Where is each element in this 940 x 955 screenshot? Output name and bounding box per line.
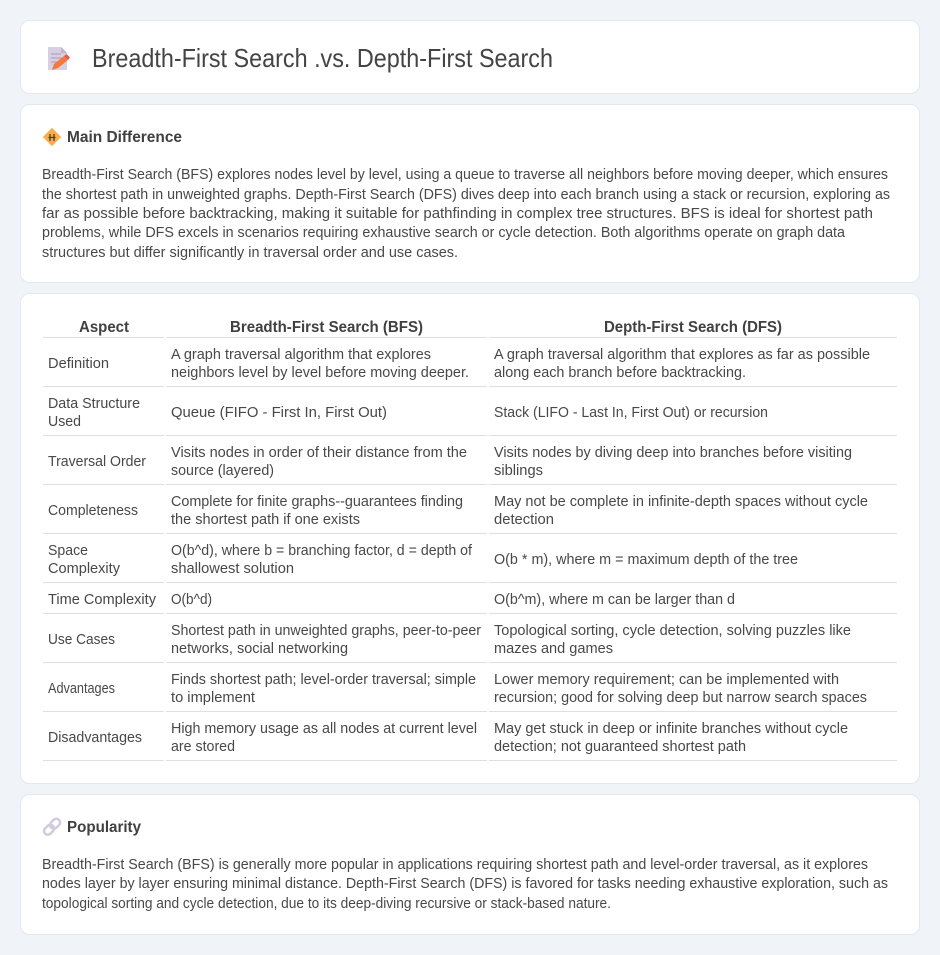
row: completeness: Completeness <box>48 503 138 519</box>
row: completeness: Complete for finite graphs--guarantees finding <box>171 494 463 510</box>
row: definition: neighbors level by level before moving deeper. <box>171 365 469 381</box>
table header row: Depth-First Search (DFS) <box>604 319 782 336</box>
row: disadvantages: are stored <box>171 739 235 755</box>
row: disadvantages: May get stuck in deep or infinite branches without cycle <box>494 721 848 737</box>
row: advantages: recursion; good for solving deep but narrow search spaces <box>494 690 867 706</box>
row: traversal order: siblings <box>494 463 543 479</box>
row: use cases <box>48 623 851 657</box>
heading: popularity: Popularity <box>67 819 141 836</box>
text block: main difference paragraph <box>42 167 890 261</box>
text block: main difference paragraph: problems, while DFS excels in scenarios requiring exhaustive search or cycle detection. Both algorithms operate on graph data <box>42 225 845 241</box>
row: use cases: mazes and games <box>494 641 613 657</box>
row: space complexity: Complexity <box>48 561 121 577</box>
row: traversal order: Visits nodes in order of their distance from the <box>171 445 467 461</box>
row: disadvantages <box>48 721 848 755</box>
row: space complexity: Space <box>48 543 88 559</box>
panel: comparison table <box>20 294 920 784</box>
row: advantages: to implement <box>171 690 255 706</box>
table header row: Breadth-First Search (BFS) <box>230 319 423 336</box>
icon: orange diamond <box>44 128 60 146</box>
text block: popularity paragraph: Breadth-First Search (BFS) is generally more popular in applications requiring shortest path and level-order traversal, as it explores <box>42 857 868 873</box>
text block: popularity paragraph: nodes layer by layer ensuring minimal distance. Depth-First Search (DFS) is favored for tasks needing exhaustive exploration, such as <box>42 876 888 892</box>
row: time complexity: O(b^d) <box>171 592 212 608</box>
row: disadvantages: High memory usage as all nodes at current level <box>171 721 477 737</box>
row: time complexity: O(b^m), where m can be larger than d <box>494 592 735 608</box>
row: traversal order: source (layered) <box>171 463 274 479</box>
row: completeness: the shortest path if one exists <box>171 512 360 528</box>
row: use cases: Topological sorting, cycle detection, solving puzzles like <box>494 623 851 639</box>
text block: popularity paragraph <box>42 857 888 912</box>
table header row: Aspect <box>79 319 130 336</box>
row: disadvantages: detection; not guaranteed shortest path <box>494 739 746 755</box>
text block: popularity paragraph: topological sorting and cycle detection, due to its deep-diving recursive or stack-based nature. <box>42 896 611 912</box>
row: completeness: May not be complete in infinite-depth spaces without cycle <box>494 494 868 510</box>
text block: main difference paragraph: the shortest path in unweighted graphs. Depth-First Search (DFS) dives deep into each branch using a stack or recursion, exploring as <box>42 187 890 203</box>
row: advantages: Finds shortest path; level-order traversal; simple <box>171 672 476 688</box>
row: time complexity: Time Complexity <box>48 592 157 608</box>
row dividers <box>43 337 897 761</box>
heading: main difference: Main Difference <box>67 129 182 146</box>
text block: main difference paragraph: far as possible before backtracking, making it suitable for pathfinding in complex tree structures. BFS is ideal for shortest path <box>42 206 873 222</box>
row: completeness: detection <box>494 512 554 528</box>
panel: main difference <box>20 104 920 282</box>
icon: chain link <box>42 817 62 836</box>
row: data structure used <box>48 396 768 430</box>
icon: document with pencil <box>48 47 70 70</box>
row: definition: A graph traversal algorithm that explores as far as possible <box>494 347 870 363</box>
row: use cases: Use Cases <box>48 632 115 648</box>
row: definition: A graph traversal algorithm that explores <box>171 347 431 363</box>
row: space complexity: shallowest solution <box>171 561 294 577</box>
header panel <box>20 20 920 94</box>
row: advantages: Advantages <box>48 681 115 697</box>
title: Breadth-First Search .vs. Depth-First Search <box>92 45 553 73</box>
text block: main difference paragraph: Breadth-First Search (BFS) explores nodes level by level, using a queue to traverse all neighbors before moving deeper, which ensures <box>42 167 888 183</box>
row: data structure used: Stack (LIFO - Last In, First Out) or recursion <box>494 405 768 421</box>
row: data structure used: Data Structure <box>48 396 140 412</box>
row: advantages: Lower memory requirement; can be implemented with <box>494 672 839 688</box>
row: space complexity: O(b^d), where b = branching factor, d = depth of <box>171 543 473 559</box>
panel: popularity <box>20 794 920 934</box>
row: definition <box>48 347 870 381</box>
row: space complexity: O(b * m), where m = maximum depth of the tree <box>494 552 798 568</box>
row: data structure used: Queue (FIFO - First In, First Out) <box>171 405 387 421</box>
row: traversal order: Traversal Order <box>48 454 146 470</box>
row: space complexity <box>48 543 798 577</box>
row: completeness <box>48 494 868 528</box>
row: definition: along each branch before backtracking. <box>494 365 746 381</box>
row: time complexity <box>48 592 735 608</box>
row: disadvantages: Disadvantages <box>48 730 142 746</box>
row: traversal order <box>48 445 852 479</box>
table header row <box>79 319 782 336</box>
text block: main difference paragraph: structures but differ significantly in traversal order and use cases. <box>42 245 458 261</box>
row: definition: Definition <box>48 356 109 372</box>
row: use cases: Shortest path in unweighted graphs, peer-to-peer <box>171 623 481 639</box>
row: advantages <box>48 672 867 706</box>
row: use cases: networks, social networking <box>171 641 348 657</box>
row: data structure used: Used <box>48 414 81 430</box>
row: traversal order: Visits nodes by diving deep into branches before visiting <box>494 445 852 461</box>
